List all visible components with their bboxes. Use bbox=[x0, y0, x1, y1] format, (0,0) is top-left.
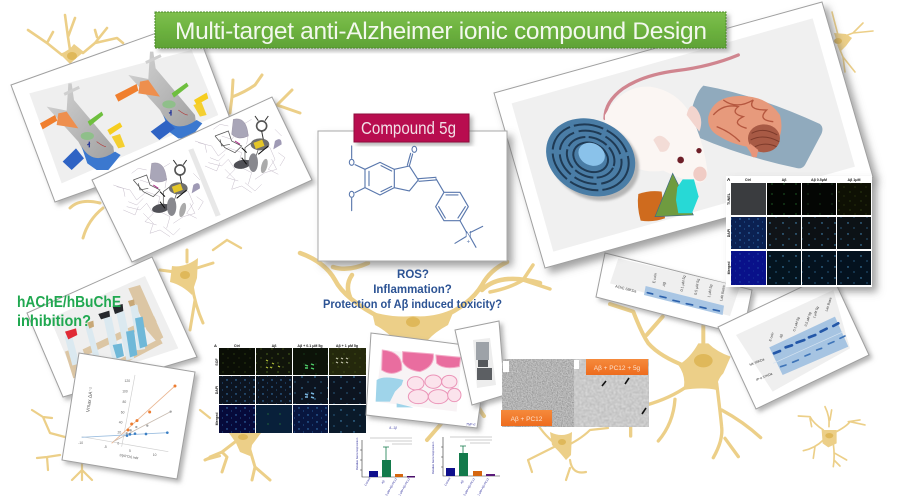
petri dish photo bbox=[376, 350, 476, 430]
bar chart: gene expression left bbox=[355, 437, 415, 496]
tubes bbox=[65, 305, 145, 366]
chemical structure bbox=[349, 146, 483, 247]
cyan block bbox=[676, 179, 699, 213]
bar chart: gene expression right: 1 μM+Aβ+PC12 bbox=[476, 477, 490, 496]
panel: western blot A bbox=[596, 253, 752, 335]
neuron: bottom right bbox=[798, 407, 865, 467]
water maze disc bbox=[533, 104, 652, 215]
bar chart: gene expression right bbox=[431, 437, 500, 496]
neuron: lower left branches bbox=[32, 410, 220, 480]
kinetic plot: 60 bbox=[121, 411, 125, 415]
kinetic plot bbox=[78, 375, 176, 460]
label: Compound 5g bbox=[354, 114, 469, 142]
text block: research questions bbox=[323, 269, 502, 311]
label: Aβ + PC12 + 5g bbox=[586, 359, 648, 375]
panel: test tubes bbox=[27, 257, 197, 397]
microscopy labels: Aβ 0.5μM bbox=[811, 178, 827, 182]
microscopy tiles bbox=[731, 183, 871, 285]
neuron: top right small bbox=[832, 12, 873, 72]
mouse tail bbox=[605, 55, 738, 118]
label: Aβ + PC12 + 5g: Aβ + PC12 + 5g bbox=[594, 365, 641, 372]
blot image: NK 65KDa bbox=[749, 357, 765, 367]
kinetic plot: -5 bbox=[104, 445, 107, 449]
petri dish photo: IL-1β bbox=[389, 426, 397, 430]
bar chart: gene expression left: 1 μM+Aβ+PC12 bbox=[397, 477, 411, 496]
panel: cell morphology images bbox=[501, 359, 649, 427]
bar chart: gene expression left: Control bbox=[363, 476, 372, 486]
device bbox=[473, 338, 496, 388]
blot image: 0.1 μM 5g bbox=[680, 275, 686, 292]
blot image: 1 μM 5g bbox=[707, 284, 713, 298]
chemical structure: N bbox=[465, 229, 471, 239]
panel: Lineweaver-Burk plot bbox=[62, 353, 195, 479]
orange cylinder bbox=[638, 191, 665, 221]
wooden rack bbox=[65, 285, 163, 378]
panel: western blot B bbox=[718, 273, 869, 409]
neuron: centre bbox=[300, 253, 540, 440]
blot image: Lab Basic bbox=[719, 284, 726, 301]
panel: TUNEL microscopy grid bbox=[726, 176, 872, 287]
blot image: 0.1 μM 5g bbox=[792, 316, 801, 332]
brain bbox=[708, 96, 781, 157]
kinetic plot: 120 bbox=[125, 379, 130, 383]
blot image bbox=[610, 258, 740, 316]
blot image bbox=[736, 290, 850, 392]
kinetic plot: 20 bbox=[117, 431, 121, 435]
microscopy labels: Ctrl bbox=[745, 178, 751, 182]
fluorescence labels: Ctrl bbox=[234, 344, 240, 348]
bar chart: gene expression right: Relative Gene Expression bbox=[431, 441, 435, 474]
fluorescence labels: Merged bbox=[215, 413, 219, 425]
heading: hAChE/hBuChE inhibition: inhibition? bbox=[17, 313, 91, 330]
fluorescence labels: SOF bbox=[215, 358, 219, 366]
bar chart: gene expression left: 5 μM+Aβ+PC12 bbox=[384, 477, 398, 496]
chemical structure: + bbox=[467, 239, 471, 245]
kinetic plot: 100 bbox=[122, 390, 128, 394]
fluorescence labels bbox=[214, 343, 358, 425]
petri dish photo: TNF-α bbox=[466, 422, 476, 426]
kinetic plot: 40 bbox=[119, 421, 123, 425]
kinetic plot: 5 bbox=[129, 449, 131, 453]
heading: hAChE/hBuChE inhibition bbox=[17, 294, 121, 330]
green prism bbox=[655, 173, 693, 217]
mouse scene bbox=[512, 18, 855, 252]
bar chart: gene expression right: 5 μM+Aβ+PC12 bbox=[462, 477, 476, 496]
fluorescence labels: A bbox=[214, 343, 217, 348]
bar chart: gene expression right: Aβ bbox=[459, 479, 465, 484]
panel: docking ligand meshes bbox=[92, 97, 312, 262]
text block: research questions: ROS? bbox=[397, 269, 429, 281]
kinetic plot: -10 bbox=[78, 441, 83, 445]
microscopy labels bbox=[727, 177, 860, 274]
panel: cell device photo bbox=[455, 321, 505, 405]
fluorescence labels: DAPI bbox=[215, 386, 219, 394]
panel: mouse behavioural test bbox=[494, 2, 873, 268]
blot image: Aβ bbox=[779, 333, 784, 339]
panel: compound 5g bbox=[318, 131, 507, 261]
fluorescence tiles bbox=[219, 348, 366, 433]
blot image: E coln bbox=[652, 273, 658, 284]
blot image: 0.5 μM 5g bbox=[804, 311, 812, 327]
heading: hAChE/hBuChE inhibition: hAChE/hBuChE bbox=[17, 294, 121, 311]
bar chart: gene expression right: Control bbox=[443, 476, 452, 486]
blot image: AChE 68KDa bbox=[615, 284, 638, 294]
fluorescence labels: Aβ bbox=[272, 344, 277, 348]
mouse head bbox=[653, 106, 707, 181]
label: Aβ + PC12: Aβ + PC12 bbox=[511, 416, 543, 423]
text block: research questions: Inflammation? bbox=[373, 284, 452, 296]
neuron: branch between panels bbox=[490, 265, 550, 292]
bar chart: gene expression left: Relative Gene Expression bbox=[355, 437, 359, 470]
microscopy labels: Aβ bbox=[782, 178, 787, 182]
neuron: bottom under fluorescence panel bbox=[205, 433, 270, 480]
microscopy labels: A bbox=[727, 177, 731, 182]
fluorescence labels: Aβ + 0.1 μM 5g bbox=[297, 344, 323, 348]
microscopy labels: DAPI bbox=[727, 229, 731, 237]
blot image: Aβ bbox=[662, 282, 667, 287]
kinetic plot: 0 bbox=[117, 441, 119, 445]
blot image: IP-α 37KDa bbox=[756, 372, 773, 382]
3D binding poses bbox=[113, 116, 285, 237]
neuron: left of test tubes bbox=[160, 250, 213, 330]
fluorescence labels: Aβ + 1 μM 5g bbox=[336, 344, 358, 348]
microscopy labels: Merged bbox=[727, 262, 731, 274]
text block: research questions: Protection of Aβ induced toxicity? bbox=[323, 299, 502, 311]
neuron: top left bbox=[28, 15, 300, 250]
tray bbox=[689, 86, 822, 168]
kinetic plot: 10 bbox=[153, 453, 157, 457]
label: Compound 5g: Compound 5g bbox=[361, 118, 456, 138]
neuron: small near cell images bbox=[528, 425, 608, 480]
blot image: 0.5 μM 5g bbox=[694, 278, 700, 295]
mouse body bbox=[605, 87, 707, 183]
panel: fluorescence microscopy grid bbox=[214, 343, 366, 433]
microscopy labels: TUNEL bbox=[727, 192, 731, 205]
blot image: Lab Basic bbox=[824, 297, 833, 312]
blot image: 1 μM 5g bbox=[812, 306, 820, 319]
microscopy labels: Aβ 1μM bbox=[848, 178, 860, 182]
kinetic plot: 80 bbox=[122, 400, 126, 404]
kinetic plot: Vmax ΔA⁻¹ bbox=[85, 387, 95, 413]
title bbox=[155, 12, 726, 48]
label: Aβ + PC12 bbox=[501, 410, 552, 426]
test tube rack photo bbox=[50, 276, 178, 382]
blot image: E coln bbox=[768, 332, 775, 342]
title: Multi-target anti-Alzheimer ionic compound Design bbox=[175, 18, 707, 45]
bar chart: gene expression left: Aβ bbox=[380, 479, 386, 484]
neuron: large right bbox=[610, 304, 761, 458]
panel: docking funnels bbox=[11, 20, 237, 202]
funnel illustrations bbox=[29, 50, 218, 183]
kinetic plot: 1/[ATCh] mM bbox=[119, 453, 139, 460]
panel: petri dishes bbox=[366, 333, 488, 430]
